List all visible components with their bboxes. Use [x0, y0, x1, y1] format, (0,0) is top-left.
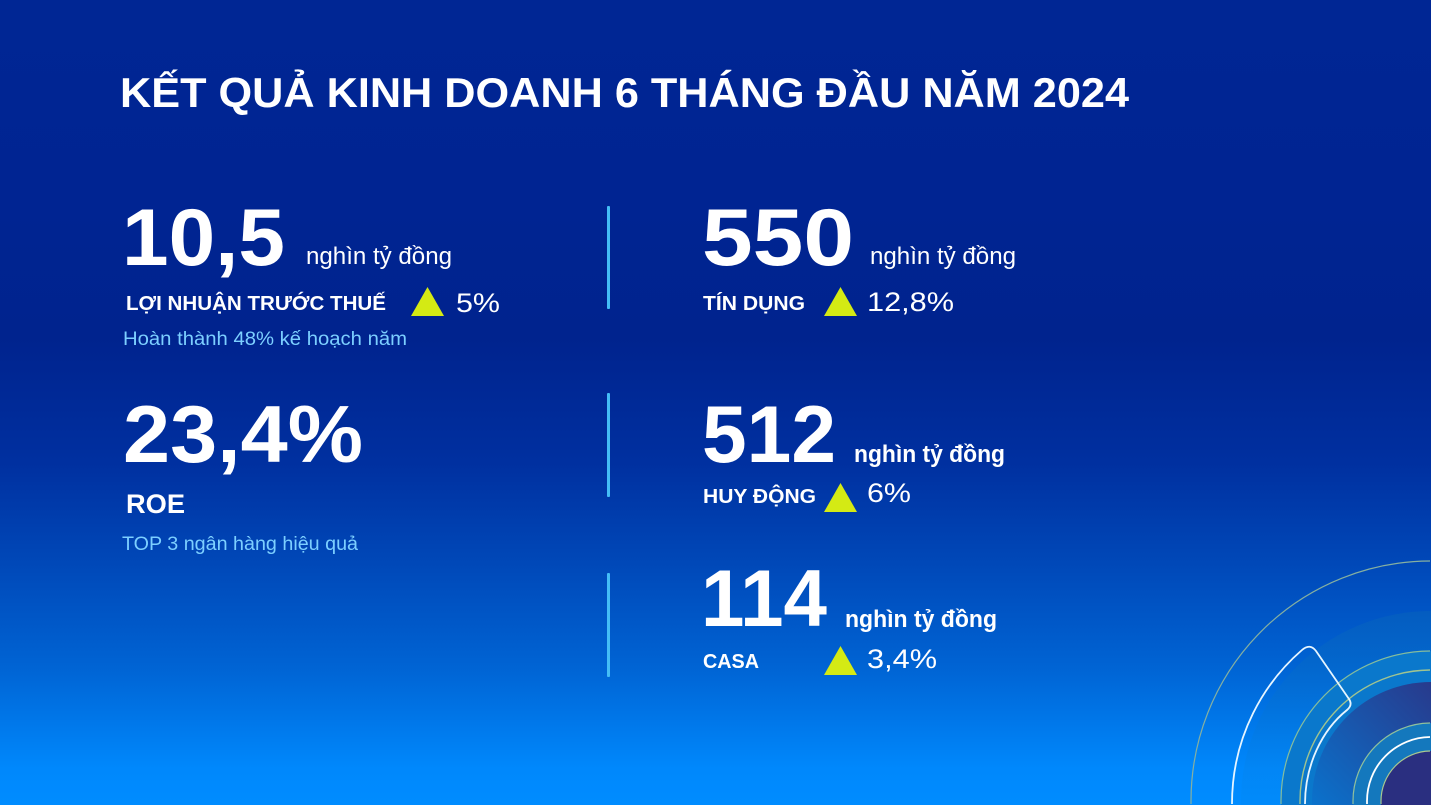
metric: credit: 12,8%: [867, 287, 954, 317]
metric: ROE: [122, 390, 363, 555]
metric: credit: 550: [702, 193, 854, 283]
metric: deposits: HUY ĐỘNG: [703, 484, 816, 508]
metric: deposits: 512: [702, 390, 836, 480]
divider: deposits: [607, 393, 610, 497]
metric: CASA: nghìn tỷ đồng: [845, 606, 997, 633]
metric: profit before tax: [122, 193, 500, 350]
metric: ROE: TOP 3 ngân hàng hiệu quả: [122, 534, 358, 555]
metric: credit: [702, 193, 1016, 317]
metric: CASA: [701, 554, 997, 675]
metric: CASA: CASA: [703, 651, 759, 673]
metric: credit: TÍN DỤNG: [703, 292, 805, 315]
metric: deposits: nghìn tỷ đồng: [854, 441, 1005, 468]
metric: profit before tax: 10,5: [122, 193, 285, 283]
divider: CASA: [607, 573, 610, 677]
metric: profit before tax: 5%: [456, 288, 500, 318]
metric: ROE: ROE: [126, 489, 185, 519]
metric: profit before tax: Hoàn thành 48% kế hoạch năm: [123, 329, 407, 350]
metric: profit before tax: nghìn tỷ đồng: [306, 243, 452, 270]
metric: deposits: 6%: [867, 478, 911, 508]
decorative concentric circles: [1191, 561, 1431, 805]
metric: CASA: 114: [701, 554, 827, 644]
metric: deposits: [702, 390, 1005, 512]
divider: credit: [607, 206, 610, 309]
metric: credit: nghìn tỷ đồng: [870, 243, 1016, 270]
metric: profit before tax: LỢI NHUẬN TRƯỚC THUẾ: [126, 291, 386, 315]
metric: CASA: 3,4%: [867, 644, 937, 674]
metric: ROE: 23,4%: [123, 390, 363, 480]
title: KẾT QUẢ KINH DOANH 6 THÁNG ĐẦU NĂM 2024: [120, 68, 1130, 116]
